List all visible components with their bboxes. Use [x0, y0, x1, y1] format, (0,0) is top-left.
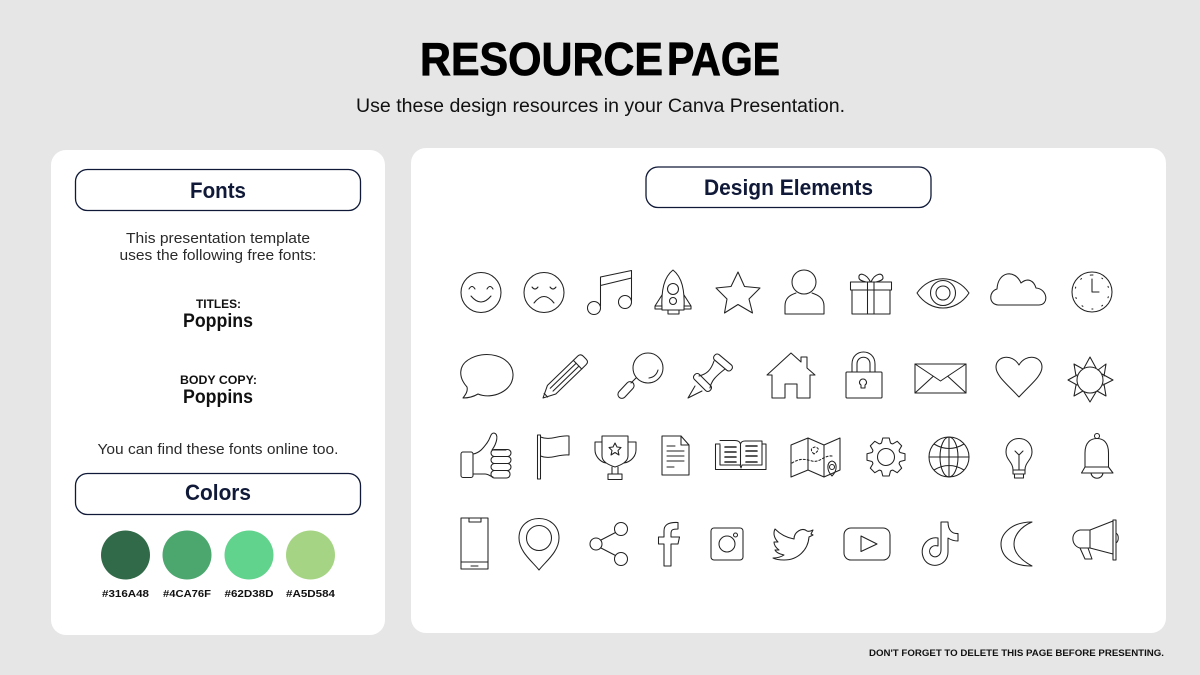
icon: smile [461, 272, 501, 312]
swatch: 316A48 [101, 530, 150, 600]
icon: star [716, 272, 760, 313]
icon: phone [461, 518, 488, 569]
heading: fonts: Fonts [190, 178, 246, 203]
text block: body copy font [180, 373, 257, 408]
icon: rocket [655, 270, 691, 314]
icon: map [791, 438, 840, 477]
heading: design elements: Design Elements [704, 175, 873, 200]
icon: instagram [711, 528, 743, 560]
icon: clock [1072, 272, 1112, 312]
text block: font intro [120, 230, 316, 264]
text block: titles font: Poppins [183, 311, 253, 332]
subtitle: Use these design resources in your Canva Presentation. [356, 96, 845, 117]
icon: gear [867, 438, 905, 476]
icon: heart [996, 357, 1042, 397]
icon: share [590, 522, 628, 566]
icon: document [662, 436, 689, 475]
text block: body copy font: BODY COPY: [180, 373, 257, 387]
icon: globe [929, 437, 969, 477]
text block: titles font: TITLES: [196, 297, 241, 311]
icon: location pin [519, 518, 559, 570]
icon: house [767, 353, 815, 398]
swatch: 62D38D [224, 530, 274, 600]
icon: sun [1068, 357, 1113, 402]
icon: bell [1082, 434, 1113, 478]
icon: padlock [846, 352, 882, 398]
footer note: DON'T FORGET TO DELETE THIS PAGE BEFORE PRESENTING. [869, 648, 1164, 658]
icon: youtube [844, 528, 890, 560]
icon: push pin [688, 353, 734, 398]
icon: eye [917, 279, 969, 308]
icon: person [785, 270, 824, 314]
text block: body copy font: Poppins [183, 387, 253, 408]
panel: design elements [411, 148, 1166, 633]
icon: tiktok [922, 522, 958, 565]
swatch: 316A48: #316A48 [102, 588, 149, 600]
icon: thumbs up [461, 433, 511, 478]
icon: facebook [658, 522, 680, 566]
icon: sad face [524, 272, 564, 312]
swatch: 4CA76F [162, 530, 212, 600]
icon: megaphone [1073, 520, 1118, 560]
icon: open book [716, 440, 766, 470]
icon: pencil [539, 353, 589, 402]
text block: find fonts note: You can find these fonts online too. [98, 441, 338, 458]
icon: gift [850, 274, 892, 314]
icon: music notes [588, 270, 632, 314]
title: RESOURCE [420, 33, 663, 85]
heading: design elements [646, 167, 931, 208]
panel: fonts and colors [51, 150, 385, 635]
swatch: 4CA76F: #4CA76F [163, 588, 212, 600]
text block: font intro: uses the following free fonts: [120, 247, 316, 264]
heading: colors [76, 474, 360, 514]
swatch: A5D584 [286, 530, 335, 600]
icon: envelope [915, 364, 966, 393]
icon: twitter [773, 529, 813, 560]
icon: trophy [595, 436, 636, 480]
icon: flag [538, 435, 569, 479]
title: PAGE [667, 33, 780, 85]
text block: font intro: This presentation template [126, 230, 310, 247]
icon: light bulb [1006, 438, 1032, 478]
icon: crescent moon [1001, 522, 1032, 566]
text block: titles font [183, 297, 253, 332]
swatch: 62D38D: #62D38D [224, 588, 274, 600]
icon: cloud [991, 274, 1046, 305]
icon: magnifier [616, 353, 663, 400]
heading: colors: Colors [185, 480, 251, 505]
heading: fonts [76, 170, 360, 210]
swatch: A5D584: #A5D584 [286, 588, 335, 600]
icon: speech bubble [461, 355, 513, 398]
